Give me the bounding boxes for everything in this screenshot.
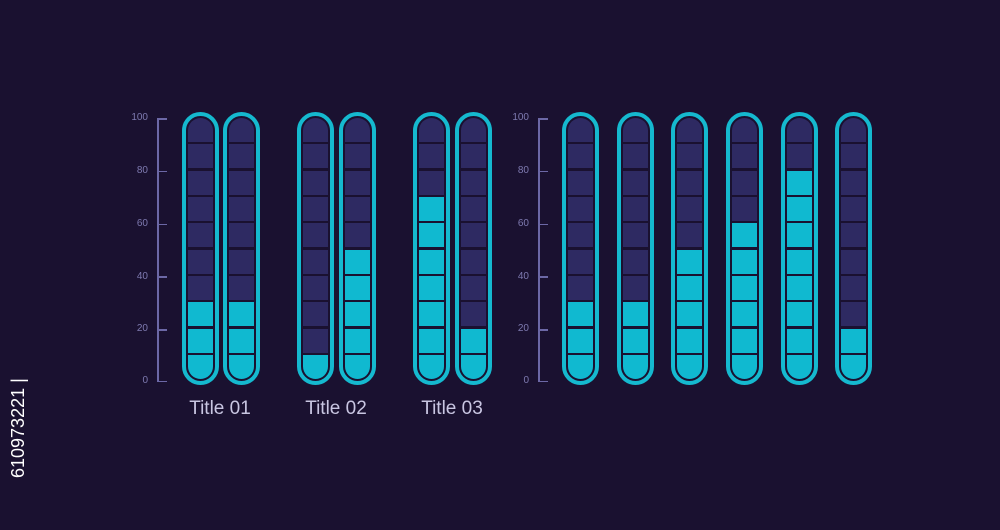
- axis right: [538, 118, 548, 382]
- axis labels left: 100: [131, 112, 148, 123]
- bar: title02 b 50: [339, 112, 376, 385]
- axis labels right: [512, 112, 529, 386]
- bar: right 4 60: [726, 112, 763, 385]
- bar: title01 a 30: [182, 112, 219, 385]
- title 01: Title 01: [189, 398, 251, 419]
- axis labels right: 40: [518, 271, 529, 282]
- bar: right 6 20: [835, 112, 872, 385]
- axis labels left: 40: [137, 271, 148, 282]
- title 02: Title 02: [305, 398, 367, 419]
- axis labels left: 20: [137, 323, 148, 334]
- bar: right 3 50: [671, 112, 708, 385]
- axis labels right: 60: [518, 218, 529, 229]
- side stock id: 610973221 |: [8, 378, 28, 478]
- bar: title03 b 20: [455, 112, 492, 385]
- bar: title02 a 10: [297, 112, 334, 385]
- axis labels right: 0: [523, 375, 529, 386]
- axis labels left: 60: [137, 218, 148, 229]
- axis labels right: 80: [518, 165, 529, 176]
- axis labels right: 20: [518, 323, 529, 334]
- bar: title03 a 70: [413, 112, 450, 385]
- bar: right 1 30: [562, 112, 599, 385]
- axis left: [157, 118, 167, 382]
- axis labels left: 0: [142, 375, 148, 386]
- bar: title01 b 30: [223, 112, 260, 385]
- title 03: Title 03: [421, 398, 483, 419]
- bar: right 5 80: [781, 112, 818, 385]
- axis labels left: 80: [137, 165, 148, 176]
- axis labels left: [131, 112, 148, 386]
- bar: right 2 30: [617, 112, 654, 385]
- axis labels right: 100: [512, 112, 529, 123]
